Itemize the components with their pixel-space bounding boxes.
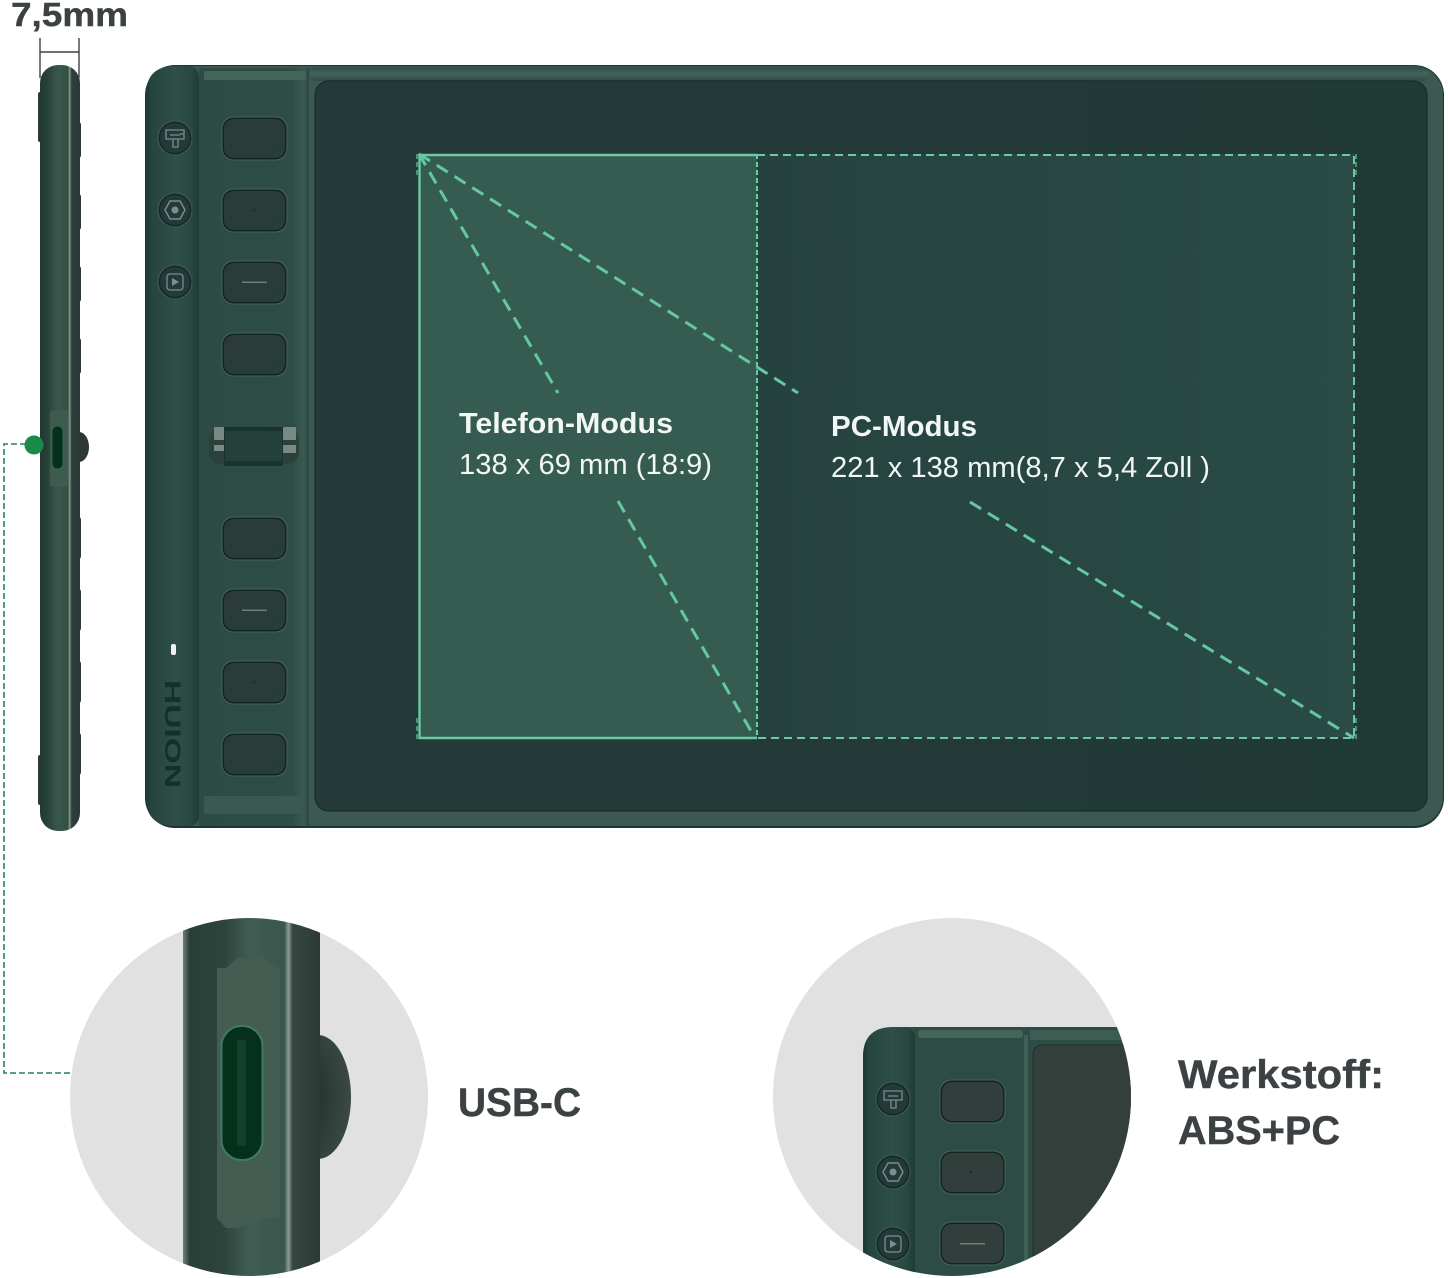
PC mode dashed outline	[757, 155, 1354, 738]
screen close-up	[1032, 1044, 1131, 1257]
PC mode area	[757, 154, 1354, 738]
icon: brush button	[158, 120, 192, 156]
phone mode diagonal	[419, 154, 755, 738]
drawing surface	[315, 81, 1427, 811]
usb panel	[50, 410, 68, 487]
brand logo HUION: HUION	[160, 680, 185, 788]
tablet front view	[145, 65, 1444, 828]
shortcut round buttons	[158, 120, 192, 300]
PC mode text: 221 x 138 mm(8,7 x 5,4 Zoll )	[831, 452, 1210, 484]
phone mode text: 138 x 69 mm (18:9)	[459, 449, 712, 481]
usb port	[52, 426, 63, 469]
play button close-up	[876, 1226, 910, 1262]
side view of tablet	[38, 65, 89, 831]
express keys column	[222, 116, 288, 776]
phone mode area	[419, 154, 757, 738]
express key panel	[199, 68, 309, 826]
PC mode diagonal	[419, 154, 1354, 738]
callout dashed connector	[4, 444, 70, 1073]
hexagon button close-up	[876, 1154, 910, 1190]
corner ticks	[417, 154, 1356, 740]
port panel	[217, 958, 280, 1228]
brush button close-up	[876, 1082, 910, 1116]
PC mode text	[831, 411, 1210, 484]
divider between modes	[756, 154, 758, 738]
label: USB-C: USB-C	[458, 1081, 581, 1125]
thickness dimension bracket	[40, 38, 79, 78]
left strip	[146, 66, 199, 826]
tablet corner close-up	[863, 1027, 1140, 1278]
phone mode outline	[420, 155, 757, 738]
callout dot	[24, 436, 44, 454]
tablet body	[145, 65, 1444, 828]
top edge highlight	[310, 67, 1428, 81]
icon: play button	[158, 264, 192, 300]
phone mode text: Telefon-Modus	[459, 408, 673, 440]
side body	[40, 65, 80, 831]
label: material: Werkstoff:	[1178, 1053, 1384, 1097]
label: material	[1178, 1053, 1384, 1153]
USB-C port	[222, 1026, 262, 1160]
scroll wheel profile	[69, 432, 89, 462]
status LED	[171, 644, 176, 655]
panel: material detail circle	[773, 918, 1153, 1278]
icon: hexagon button	[158, 192, 192, 228]
scroll wheel	[209, 427, 299, 466]
label: material: ABS+PC	[1178, 1109, 1340, 1153]
panel: USB-C detail circle	[70, 900, 428, 1278]
PC mode text: PC-Modus	[831, 411, 977, 443]
side buttons bumps	[38, 92, 81, 805]
key buttons close-up	[940, 1080, 1006, 1124]
scroll wheel close-up	[320, 1035, 351, 1159]
side body close-up	[183, 900, 320, 1278]
phone mode text	[459, 408, 712, 481]
